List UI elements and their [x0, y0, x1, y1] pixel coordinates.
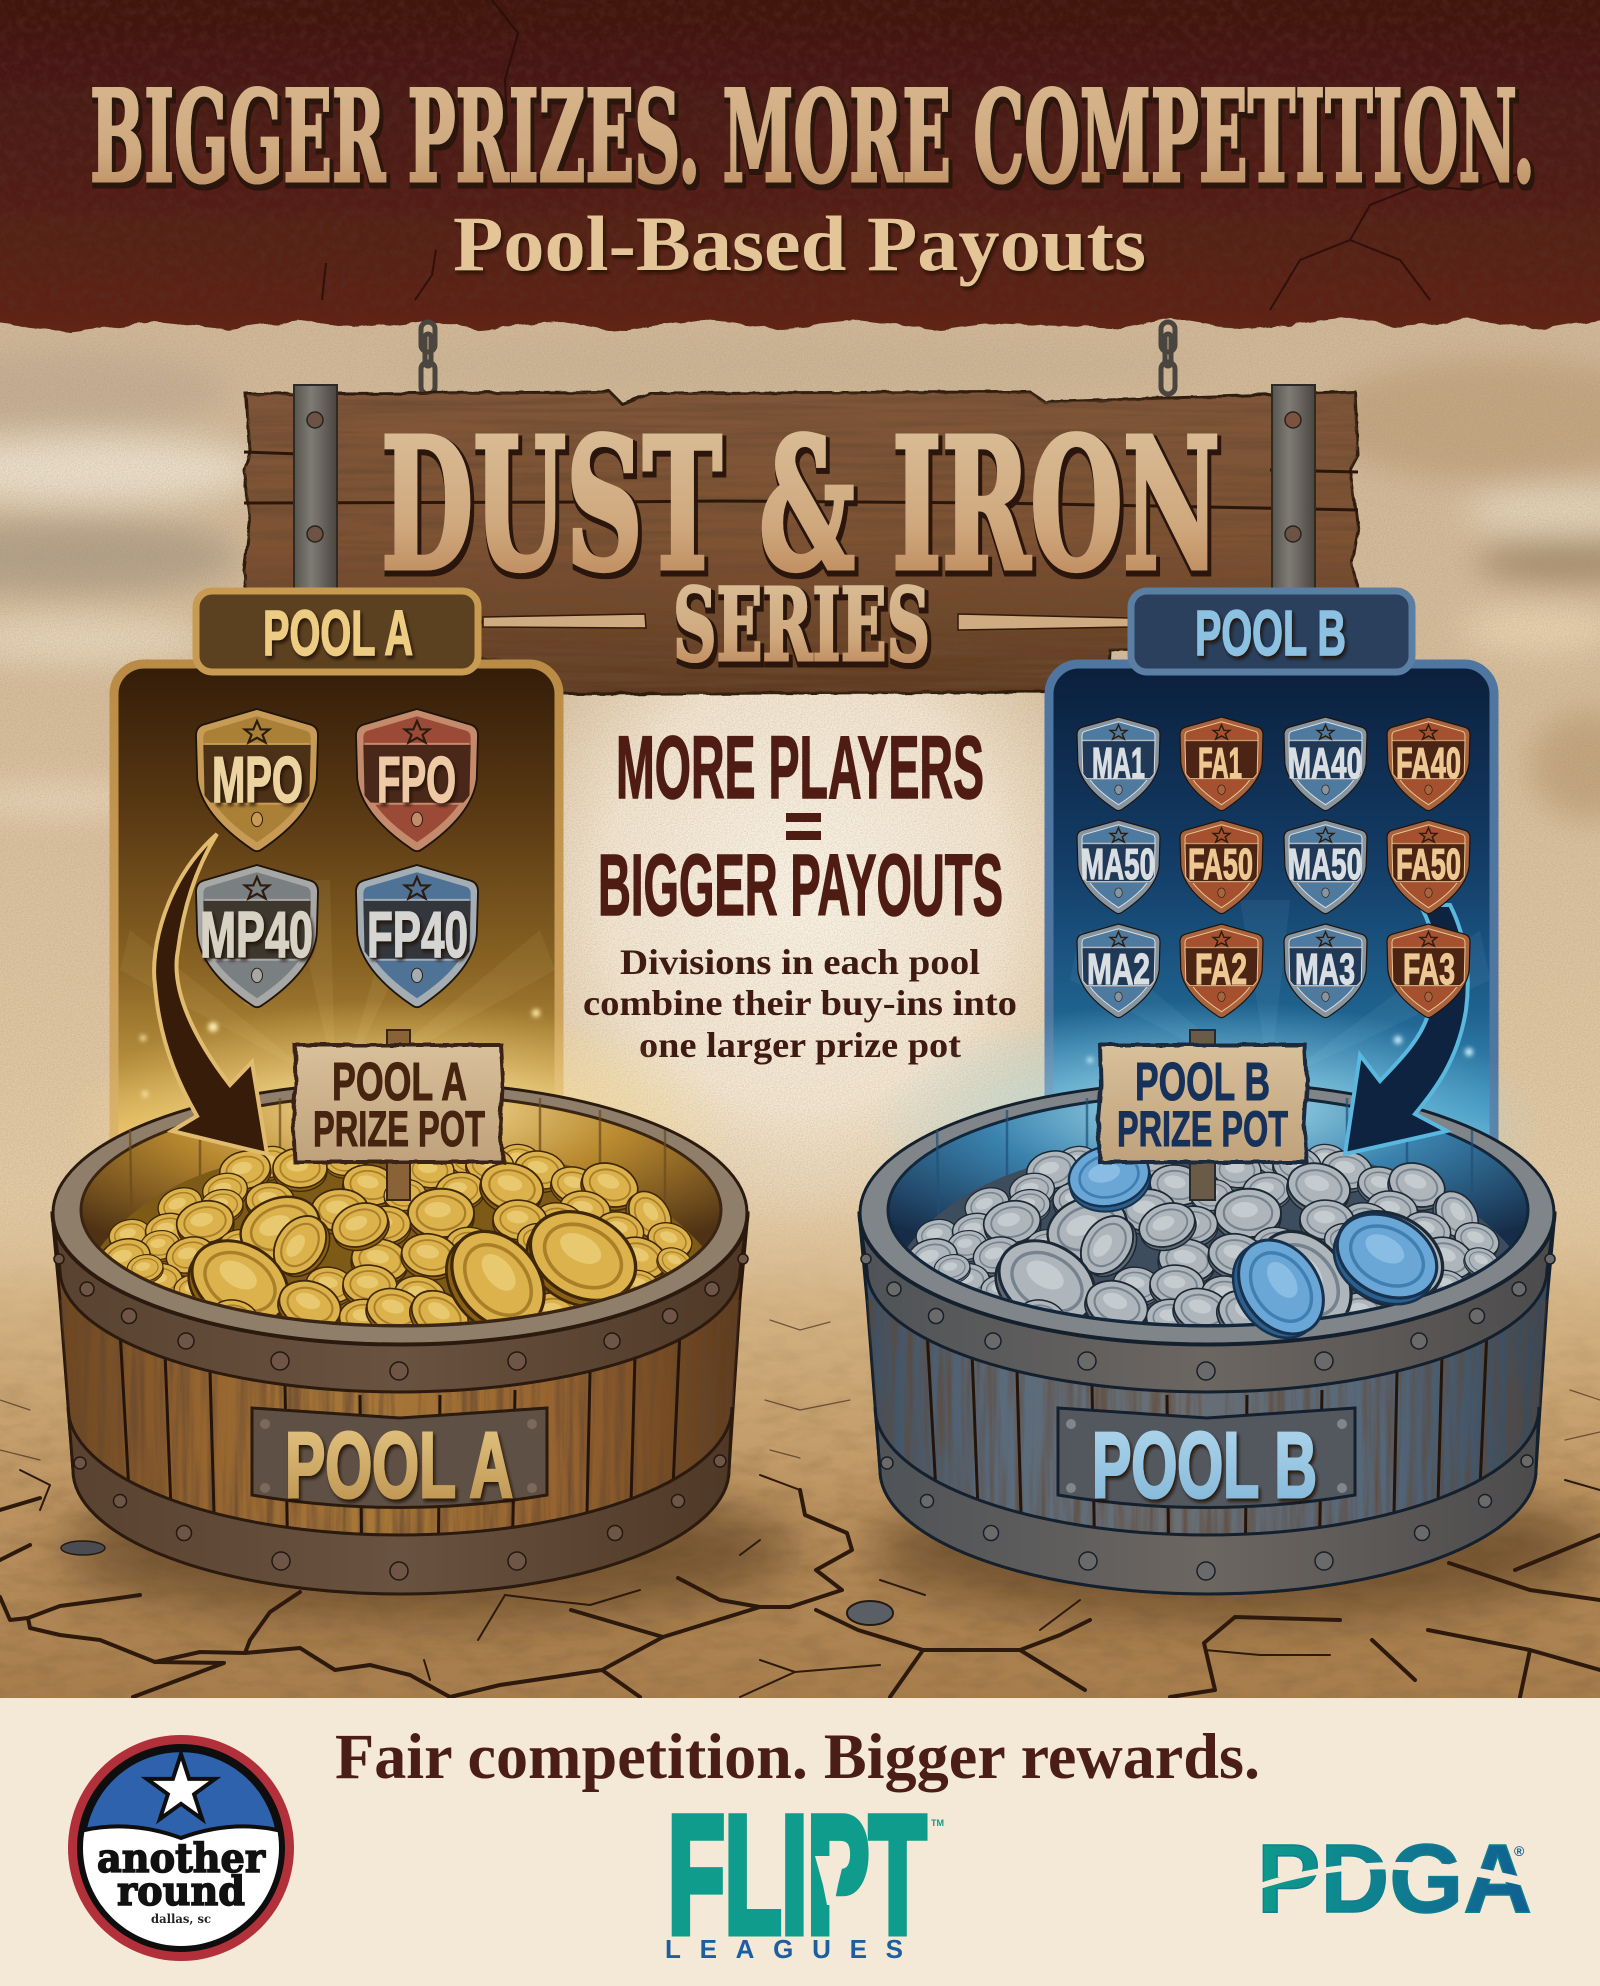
wooden sign: [244, 385, 1358, 694]
series flourishes: [483, 614, 1130, 630]
logo: flipt leagues: [665, 1783, 944, 1968]
subtitle: Pool-Based Payouts: [453, 200, 1146, 287]
ground cracks: [0, 1320, 1600, 1697]
badges: pool b: [1077, 717, 1470, 1018]
barrel rim: [860, 1082, 1554, 1344]
leagues wordmark: LEAGUES: [665, 1934, 903, 1964]
barrel body: [859, 1213, 1555, 1594]
badge fa3: [1387, 924, 1470, 1018]
badge fa50: FA50: [1188, 840, 1253, 889]
explanation text: [583, 942, 1017, 1065]
tag text pool a: POOL A: [263, 597, 413, 669]
plank seams: [244, 452, 1358, 624]
heading bigger payouts: BIGGER PAYOUTS: [598, 837, 1003, 934]
pebble: [847, 1601, 893, 1625]
badge mp40: [196, 865, 318, 1007]
explanation text: one larger prize pot: [639, 1025, 961, 1065]
center message: [583, 717, 1017, 1065]
badge fa3: FA3: [1403, 945, 1455, 994]
sparkles: [1087, 1036, 1473, 1063]
badge fpo: FPO: [377, 743, 456, 816]
trademark: TM: [931, 1818, 944, 1828]
logo wordmark: another: [97, 1835, 266, 1882]
footer band: [0, 1698, 1600, 1986]
badge fp40: FP40: [367, 898, 468, 971]
barrel lower band: [68, 1407, 732, 1594]
basket icon: [815, 1856, 845, 1905]
panel: pool b: [1049, 664, 1494, 1224]
background sky: [0, 300, 1600, 1700]
barrel interior: [888, 1094, 1528, 1326]
badge ma1: MA1: [1092, 739, 1145, 788]
hanging chains: [421, 322, 1175, 394]
tag: pool a: [196, 591, 478, 672]
sign subtitle series: SERIES: [673, 566, 930, 684]
barrel ground shadows: [60, 1480, 1600, 1620]
badge ma1: [1077, 717, 1160, 811]
iron strap right: [1272, 385, 1315, 595]
prize sign pool b: [1098, 1030, 1307, 1200]
badge mpo: MPO: [212, 743, 303, 816]
barrel pool a: [52, 1000, 748, 1594]
barrel body: [52, 1213, 748, 1594]
plaque text pool b: POOL B: [1092, 1413, 1317, 1517]
badge ma40: MA40: [1288, 739, 1362, 788]
logo: another round: [68, 1735, 294, 1961]
badge ma3: MA3: [1295, 945, 1355, 994]
iron strap left: [294, 385, 337, 595]
barrel upper band: [859, 1213, 1555, 1392]
barrel glow: [60, 1000, 740, 1260]
plaque text pool a: POOL A: [285, 1413, 513, 1517]
prize sign text b: POOL B: [1135, 1052, 1270, 1112]
badge fa1: FA1: [1198, 739, 1242, 788]
badge ma2: [1077, 924, 1160, 1018]
barrel glow: [867, 1000, 1547, 1260]
plaque: [252, 1408, 547, 1517]
logo: flipt leagues: FLIPT: [668, 1783, 926, 1968]
heading more players: MORE PLAYERS: [616, 717, 984, 817]
right chain: [1161, 322, 1175, 394]
coin pile: [908, 1144, 1510, 1324]
tag: pool b: [1131, 591, 1412, 672]
coin pile: [100, 1144, 702, 1324]
badge fa2: [1180, 924, 1263, 1018]
logo star: [147, 1754, 215, 1819]
badge fa40: [1387, 717, 1470, 811]
prize sign pool a: PRIZE POT: [313, 1101, 485, 1157]
badge mp40: MP40: [200, 898, 313, 971]
explanation text: Divisions in each pool: [620, 942, 980, 982]
sparkles: [140, 997, 540, 1097]
badge ma40: [1284, 717, 1367, 811]
badge fp40: [356, 865, 478, 1007]
panel: pool a: [114, 664, 559, 1224]
clouds: [0, 337, 1600, 820]
prize sign pool b: PRIZE POT: [1117, 1101, 1288, 1157]
logo blue field: [85, 1750, 277, 1838]
badge fa50: [1180, 820, 1263, 914]
barrel rim: [53, 1082, 747, 1344]
badge fa2: FA2: [1195, 945, 1247, 994]
footer tagline: Fair competition. Bigger rewards.: [335, 1721, 1260, 1793]
prize sign pool a: [293, 1030, 503, 1200]
badge ma50: MA50: [1081, 840, 1155, 889]
arrow pool b: [1345, 905, 1468, 1154]
badge ma50 second: [1284, 820, 1367, 914]
equals sign: [786, 813, 821, 840]
swoosh: [1257, 1862, 1532, 1890]
barrel upper band: [52, 1213, 748, 1392]
barrel lower band: [875, 1407, 1539, 1594]
logo: pdga: PDGA: [1257, 1824, 1532, 1933]
arrow pool a: [154, 834, 267, 1154]
light rays: [120, 880, 555, 1080]
prize sign text a: POOL A: [332, 1052, 467, 1112]
plaque: [1058, 1408, 1355, 1517]
left chain: [421, 322, 435, 394]
explanation text: combine their buy-ins into: [583, 983, 1017, 1023]
badge ma50 second: MA50: [1288, 840, 1362, 889]
badge fa1: [1180, 717, 1263, 811]
badge fa50 second: FA50: [1396, 840, 1461, 889]
barrel rivets: [861, 1254, 1555, 1580]
barrel pool b: [859, 1000, 1555, 1594]
badge ma3: [1284, 924, 1367, 1018]
blue feature discs: [1063, 1139, 1451, 1354]
badge fa50 second: [1387, 820, 1470, 914]
registered mark: ®: [1514, 1843, 1525, 1859]
badge fpo: [356, 709, 478, 851]
badge fa40: FA40: [1396, 739, 1461, 788]
badge ma2: MA2: [1087, 945, 1150, 994]
tag text pool b: POOL B: [1195, 597, 1346, 669]
barrel rivets: [54, 1254, 748, 1580]
barrel interior: [81, 1094, 721, 1326]
top banner: [0, 0, 1600, 332]
badge ma50: [1077, 820, 1160, 914]
cracked desert ground: [0, 1190, 1600, 1700]
light rays: [1070, 900, 1490, 1080]
logo: another round: round: [117, 1868, 245, 1915]
badges: pool a: [196, 709, 478, 1007]
logo: another round: dallas, sc: [151, 1912, 211, 1926]
banner cracks: [322, 0, 1530, 310]
pebble small: [61, 1541, 105, 1555]
badge mpo: [196, 709, 318, 851]
